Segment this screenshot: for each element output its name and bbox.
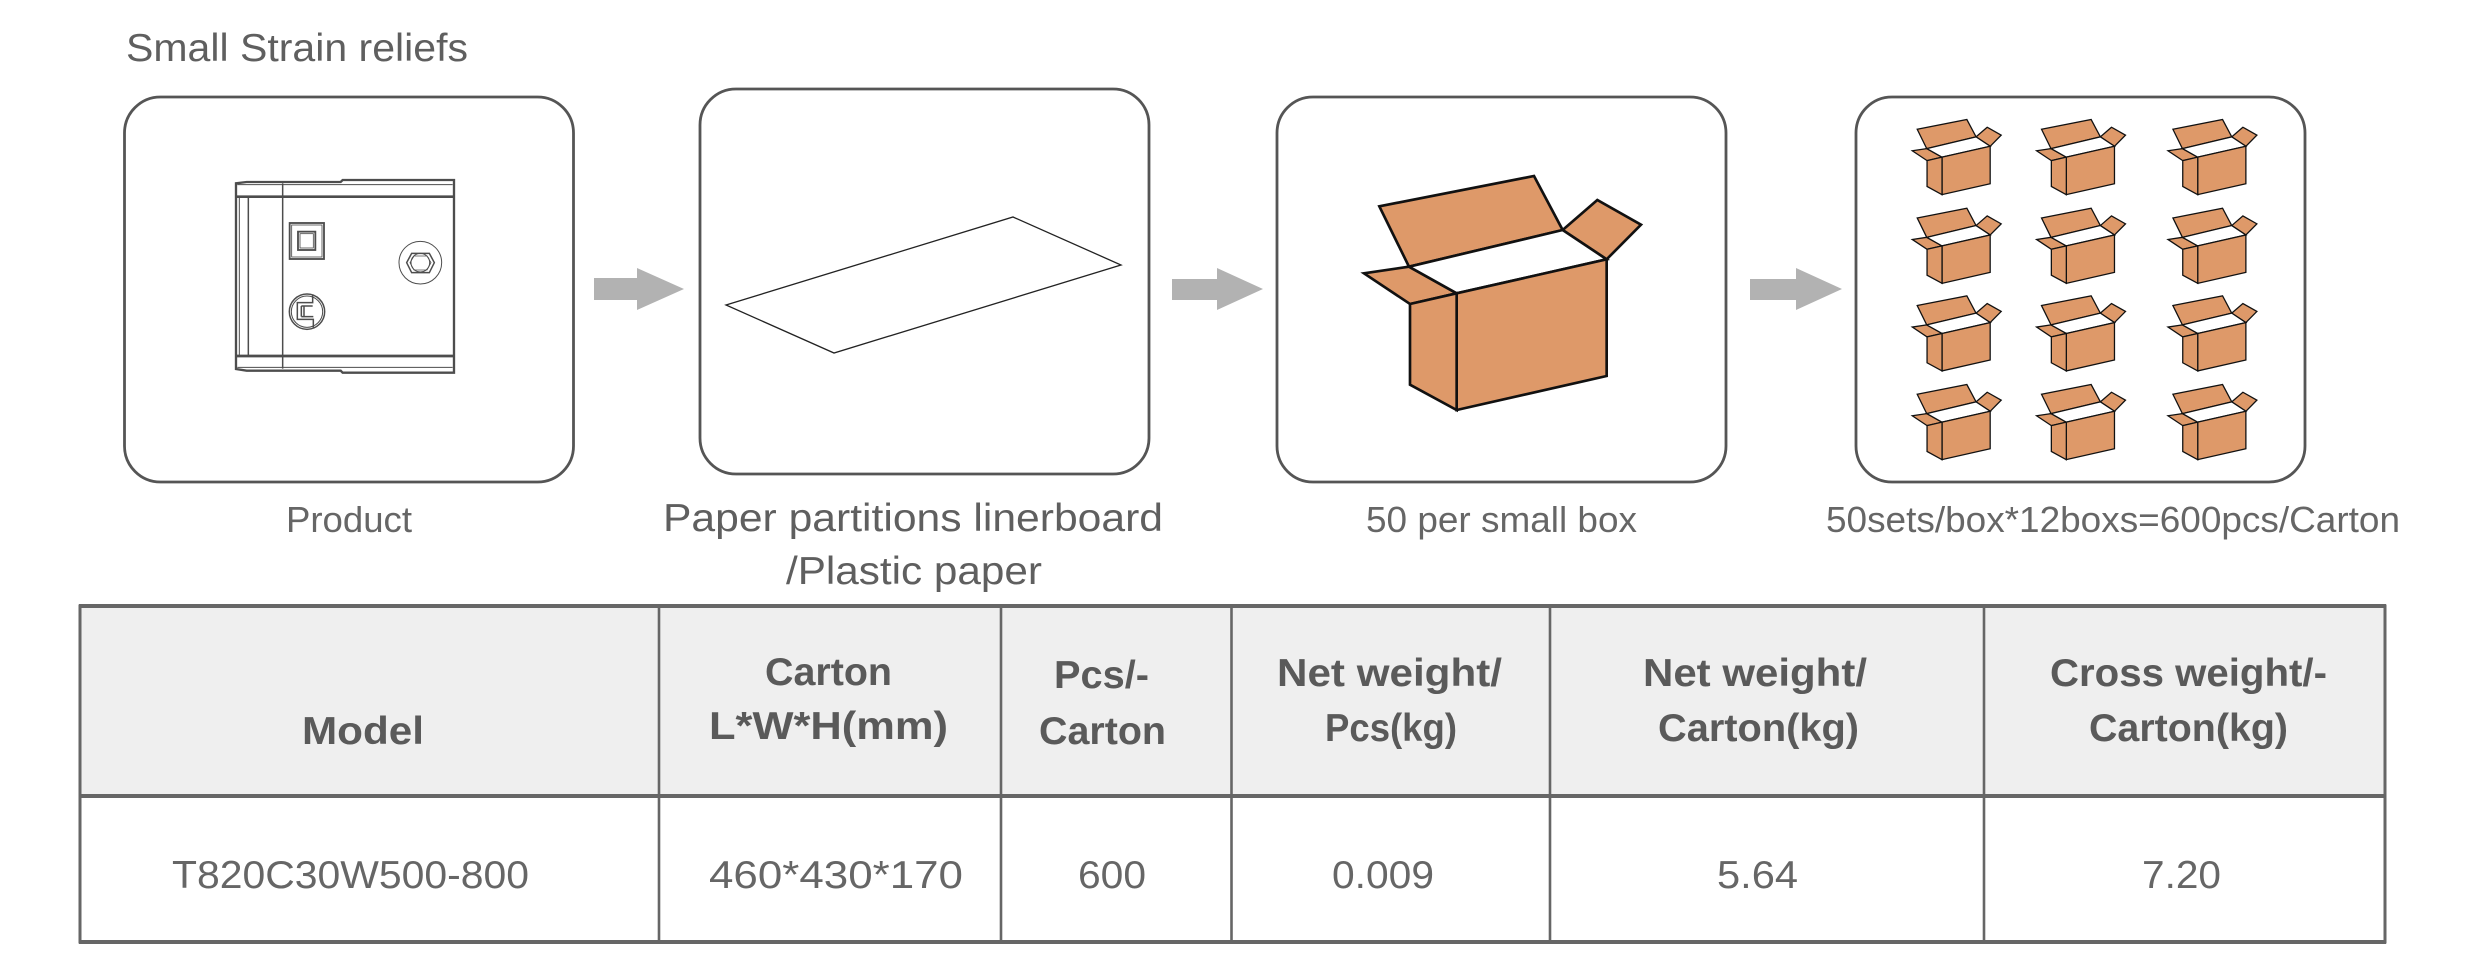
panel: paper partition [700, 89, 1149, 474]
cell: pcs per carton value: 600 [1078, 854, 1146, 897]
header: net weight per piece [1277, 652, 1502, 750]
header: carton dimensions: L*W*H(mm) [709, 705, 948, 748]
header: pcs per carton: Pcs/- [1054, 654, 1149, 697]
caption: product: Product [286, 499, 412, 540]
caption: paper partitions: /Plastic paper [786, 550, 1042, 593]
header: net weight per piece: Net weight/ [1277, 652, 1502, 695]
header: pcs per carton: Carton [1039, 710, 1166, 753]
cell: carton dimensions value: 460*430*170 [709, 854, 963, 897]
table header background [79, 605, 2385, 796]
header: carton dimensions: Carton [765, 651, 892, 694]
cell: cross weight per carton value: 7.20 [2142, 854, 2221, 897]
cell: net weight per carton value: 5.64 [1717, 854, 1798, 897]
header: net weight per carton: Carton(kg) [1658, 707, 1859, 750]
panel: small box [1277, 97, 1726, 482]
table: packing data [79, 605, 2386, 942]
header: net weight per carton [1643, 652, 1867, 750]
header: cross weight per carton [2050, 652, 2327, 750]
cell: model value: T820C30W500-800 [172, 854, 529, 897]
arrow 3 [1750, 268, 1842, 310]
icon grid: 12 small boxes [1912, 120, 2257, 460]
header: net weight per piece: Pcs(kg) [1325, 707, 1457, 750]
caption: paper partitions: Paper partitions linerboard [663, 497, 1163, 540]
title: Small Strain reliefs [126, 27, 468, 70]
cell: net weight per piece value: 0.009 [1332, 854, 1434, 897]
header: carton dimensions [709, 651, 948, 748]
icon: strain relief product drawing [236, 180, 454, 373]
caption: small box: 50 per small box [1366, 499, 1637, 540]
arrow 1 [594, 268, 684, 310]
icon: open carton box [1364, 176, 1641, 410]
header: pcs per carton [1039, 654, 1166, 753]
table grid [79, 606, 2386, 942]
panel: product [124, 97, 574, 482]
header: model: Model [302, 710, 424, 753]
header: cross weight per carton: Carton(kg) [2089, 707, 2288, 750]
header: net weight per carton: Net weight/ [1643, 652, 1867, 695]
icon: paper sheet [726, 217, 1121, 353]
panel: carton with twelve boxes [1856, 97, 2305, 482]
caption: carton quantity: 50sets/box*12boxs=600pcs/Carton [1826, 499, 2400, 540]
arrow 2 [1172, 268, 1263, 310]
header: cross weight per carton: Cross weight/- [2050, 652, 2327, 695]
caption: paper partitions [663, 497, 1163, 593]
